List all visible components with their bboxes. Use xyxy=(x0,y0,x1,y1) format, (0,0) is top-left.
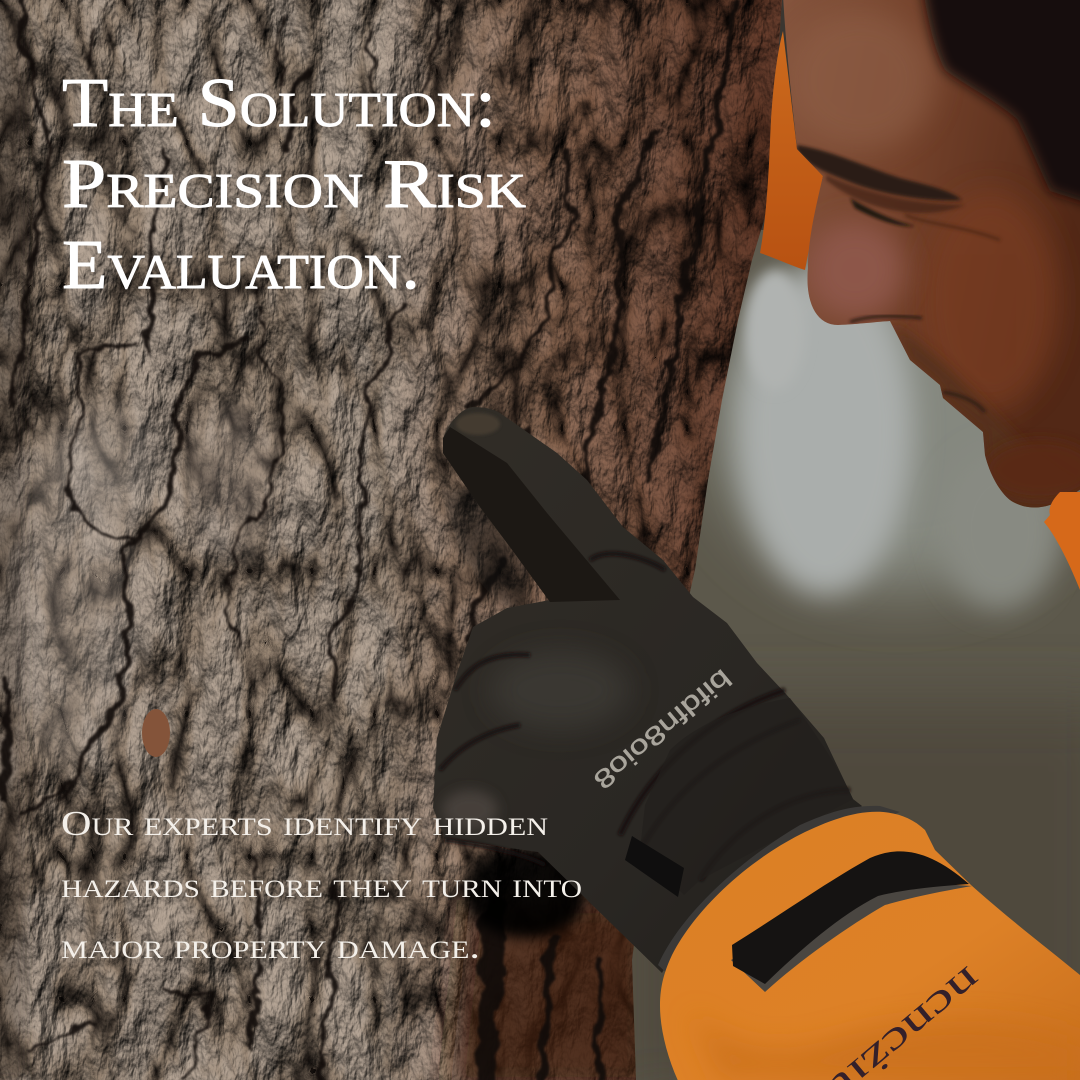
closed eyelashes xyxy=(850,198,915,226)
strap grey edge xyxy=(731,880,972,992)
fingertip dust xyxy=(456,413,500,435)
knuckle highlights xyxy=(490,650,630,730)
grey cuff band xyxy=(658,806,900,978)
bark cracks xyxy=(4,0,735,1080)
finger folds xyxy=(440,554,665,865)
warm reddish tint on the right flank xyxy=(406,0,782,1080)
orange sleeve xyxy=(660,812,1080,1080)
gloved hand pointing at the bark xyxy=(433,407,862,973)
orange jacket collar xyxy=(1044,492,1080,590)
body text xyxy=(61,804,582,966)
dark hair xyxy=(920,0,1080,210)
finger side shading xyxy=(443,427,620,602)
stubble and lip shade xyxy=(896,330,1050,508)
title xyxy=(62,65,526,304)
title: Evaluation. xyxy=(62,227,420,304)
orange hood xyxy=(760,31,823,270)
forehead highlight xyxy=(785,10,935,150)
wrist straps xyxy=(620,690,850,880)
light bark plates xyxy=(0,430,140,770)
brow ridge shadow xyxy=(826,175,965,213)
face in profile xyxy=(783,0,1080,508)
dark reddish base of trunk xyxy=(450,900,650,1080)
reddish bark scar xyxy=(142,709,170,757)
nostril line xyxy=(850,316,922,322)
tree trunk bark xyxy=(0,0,800,1080)
cheek warm tone xyxy=(920,190,1060,410)
eyebrow xyxy=(797,145,962,200)
wrist panel xyxy=(640,698,853,895)
nose xyxy=(805,220,905,320)
title: Precision Risk xyxy=(62,146,526,223)
crease under eye xyxy=(905,215,1000,240)
sleeve lettering: ncncżıu xyxy=(817,958,991,1080)
glove logo: bifdfn8oio8 xyxy=(588,663,737,796)
glove body xyxy=(433,407,862,973)
glove cast shadow xyxy=(463,846,587,938)
black tab xyxy=(625,836,684,897)
body text: Our experts identify hidden xyxy=(61,804,548,843)
blurred forest background xyxy=(620,230,1080,1080)
sleeve shading xyxy=(690,1010,1080,1080)
body text: major property damage. xyxy=(61,927,480,966)
velcro strap xyxy=(732,851,969,984)
mouth line xyxy=(943,392,985,412)
jacket sleeve xyxy=(658,806,1080,1080)
body text: hazards before they turn into xyxy=(61,866,582,905)
title: The Solution: xyxy=(62,65,496,142)
